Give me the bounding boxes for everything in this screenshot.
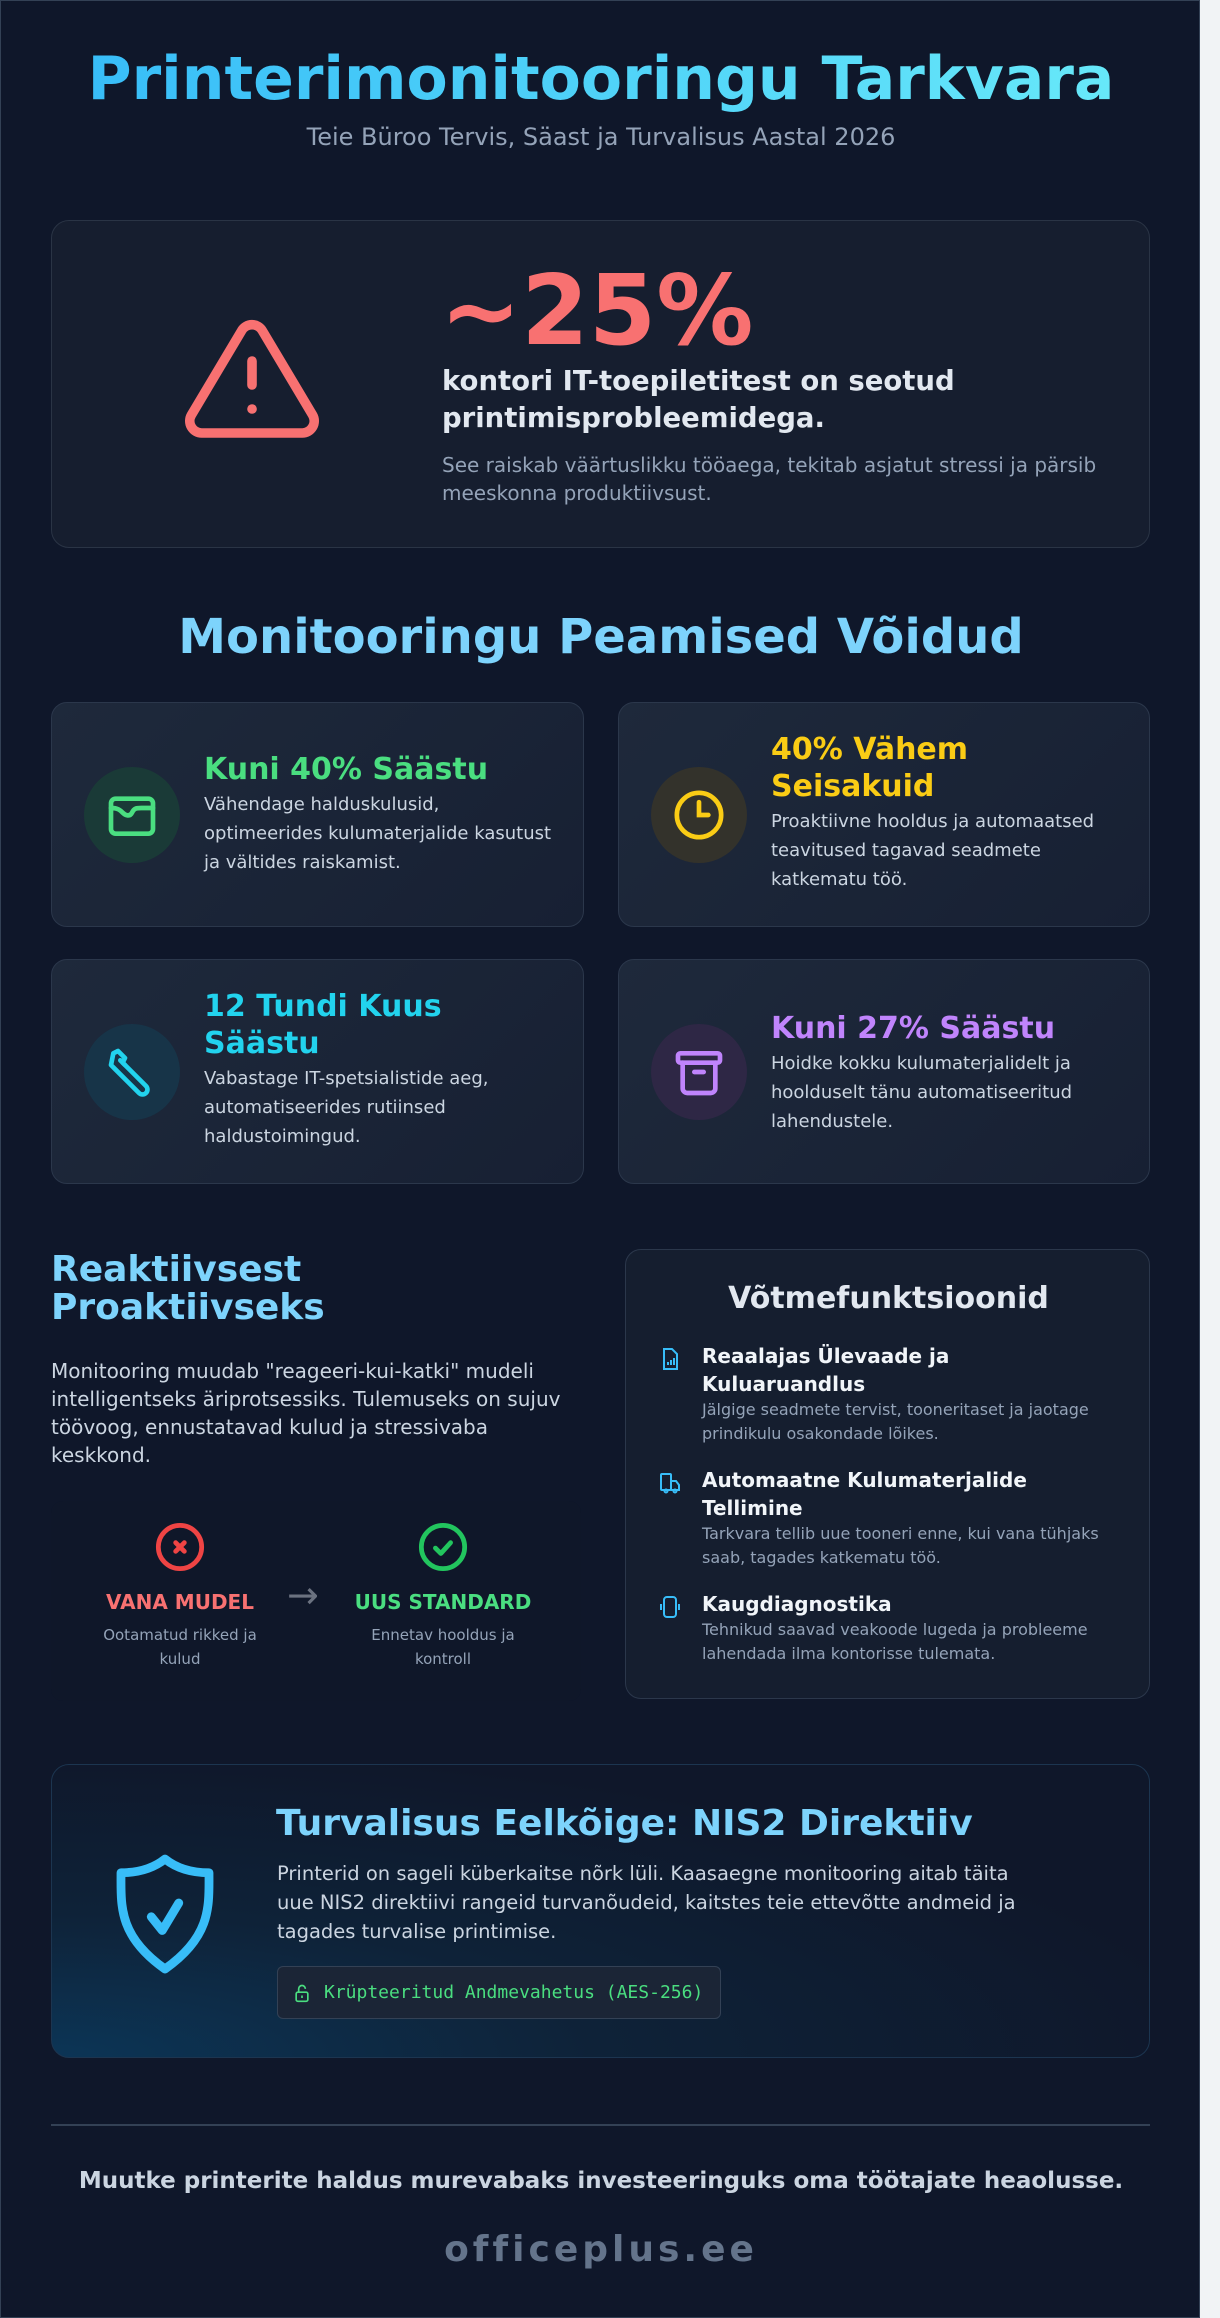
arrow: → <box>287 1573 319 1617</box>
feature: remote diagnostics: Kaugdiagnostika <box>702 1592 892 1616</box>
panel: NIS2 security <box>51 1764 1150 2058</box>
NIS2 title: Turvalisus Eelkõige: NIS2 Direktiiv <box>276 1803 973 1844</box>
badge: encryption: Krüpteeritud Andmevahetus (AES-256) <box>324 1982 703 2003</box>
panel: key features <box>625 1249 1150 1699</box>
feature: remote diagnostics: Tehnikud saavad veakoode lugeda ja probleeme lahendada ilma kontorisse tulemata. <box>702 1620 1088 1663</box>
icon: x circle <box>156 1523 204 1571</box>
label: new standard: UUS STANDARD <box>355 1590 531 1614</box>
text <box>204 752 551 873</box>
icon: device <box>660 1596 680 1618</box>
sub: new standard: Ennetav hooldus ja kontroll <box>371 1626 515 1668</box>
text: 40% Vähem Seisakuid <box>771 732 968 804</box>
text <box>771 1011 1072 1132</box>
text <box>771 732 1094 890</box>
icon: truck <box>660 1473 680 1494</box>
icon: check circle <box>418 1523 468 1571</box>
card: savings 27 <box>618 959 1150 1184</box>
text: Proaktiivne hooldus ja automaatsed teavitused tagavad seadmete katkematu töö. <box>771 811 1094 890</box>
feature: remote diagnostics <box>660 1592 1088 1663</box>
panel: hero stat <box>51 220 1150 548</box>
heading: benefits: Monitooringu Peamised Võidud <box>178 609 1024 665</box>
text: Kuni 40% Säästu <box>204 752 488 787</box>
heading: reactive to proactive: Reaktiivsest Proaktiivseks <box>51 1249 325 1328</box>
card: 12 hours <box>51 959 584 1184</box>
feature: realtime: Reaalajas Ülevaade ja Kuluaruandlus <box>702 1344 949 1396</box>
feature: auto ordering <box>660 1468 1099 1567</box>
icon: shield <box>116 1854 214 1974</box>
title: Printerimonitooringu Tarkvara <box>88 44 1114 114</box>
sub: old model: Ootamatud rikked ja kulud <box>103 1626 257 1668</box>
feature: auto ordering: Automaatne Kulumaterjalide Tellimine <box>702 1468 1027 1520</box>
text: Hoidke kokku kulumaterjalidelt ja hoolduselt tänu automatiseeritud lahendustele. <box>771 1053 1072 1132</box>
icon: wallet <box>84 767 180 863</box>
feature: realtime: Jälgige seadmete tervist, tooneritaset ja jaotage prindikulu osakondade lõikes. <box>702 1400 1089 1443</box>
NIS2 text: Printerid on sageli küberkaitse nõrk lüli. Kaasaegne monitooring aitab täita uue NIS2 direktiivi rangeid turvanõudeid, kaitstes teie ettevõtte andmeid ja tagades turvalise printimise. <box>277 1862 1016 1943</box>
footer tagline: Muutke printerite haldus murevabaks investeeringuks oma töötajate heaolusse. <box>79 2168 1123 2194</box>
feature: auto ordering: Tarkvara tellib uue tooneri enne, kui vana tühjaks saab, tagades katkematu töö. <box>702 1524 1099 1567</box>
stat description: See raiskab väärtuslikku tööaega, tekitab asjatut stressi ja pärsib meeskonna produktiivsust. <box>442 453 1096 505</box>
text: 12 Tundi Kuus Säästu <box>204 989 442 1061</box>
badge: encryption <box>277 1966 721 2019</box>
icon: report <box>663 1348 678 1370</box>
label: old model: VANA MUDEL <box>106 1590 254 1614</box>
icon: wrench <box>84 1024 180 1120</box>
feature: realtime <box>663 1344 1089 1443</box>
text: Kuni 27% Säästu <box>771 1011 1055 1046</box>
text: Vabastage IT-spetsialistide aeg, automatiseerides rutiinsed haldustoimingud. <box>204 1068 488 1147</box>
icon: archive <box>651 1024 747 1120</box>
stat caption: kontori IT-toepiletitest on seotud printimisprobleemidega. <box>442 365 955 434</box>
comparison: old vs new <box>51 1501 581 1701</box>
features title: Võtmefunktsioonid <box>728 1281 1049 1316</box>
subtitle: Teie Büroo Tervis, Säast ja Turvalisus Aastal 2026 <box>307 123 895 151</box>
card: downtime <box>618 702 1150 927</box>
text <box>204 989 488 1147</box>
text: Vähendage halduskulusid, optimeerides kulumaterjalide kasutust ja vältides raiskamist. <box>204 794 551 873</box>
icon: warning triangle <box>185 320 319 438</box>
icon: clock <box>651 767 747 863</box>
footer brand: officeplus.ee <box>444 2229 758 2270</box>
card: savings 40 <box>51 702 584 927</box>
big stat: ~25% <box>440 254 753 367</box>
paragraph: Monitooring muudab "reageeri-kui-katki" mudeli intelligentseks äriprotsessiks. Tulemuseks on sujuv töövoog, ennustatavad kulud ja stressivaba keskkond. <box>51 1359 560 1467</box>
